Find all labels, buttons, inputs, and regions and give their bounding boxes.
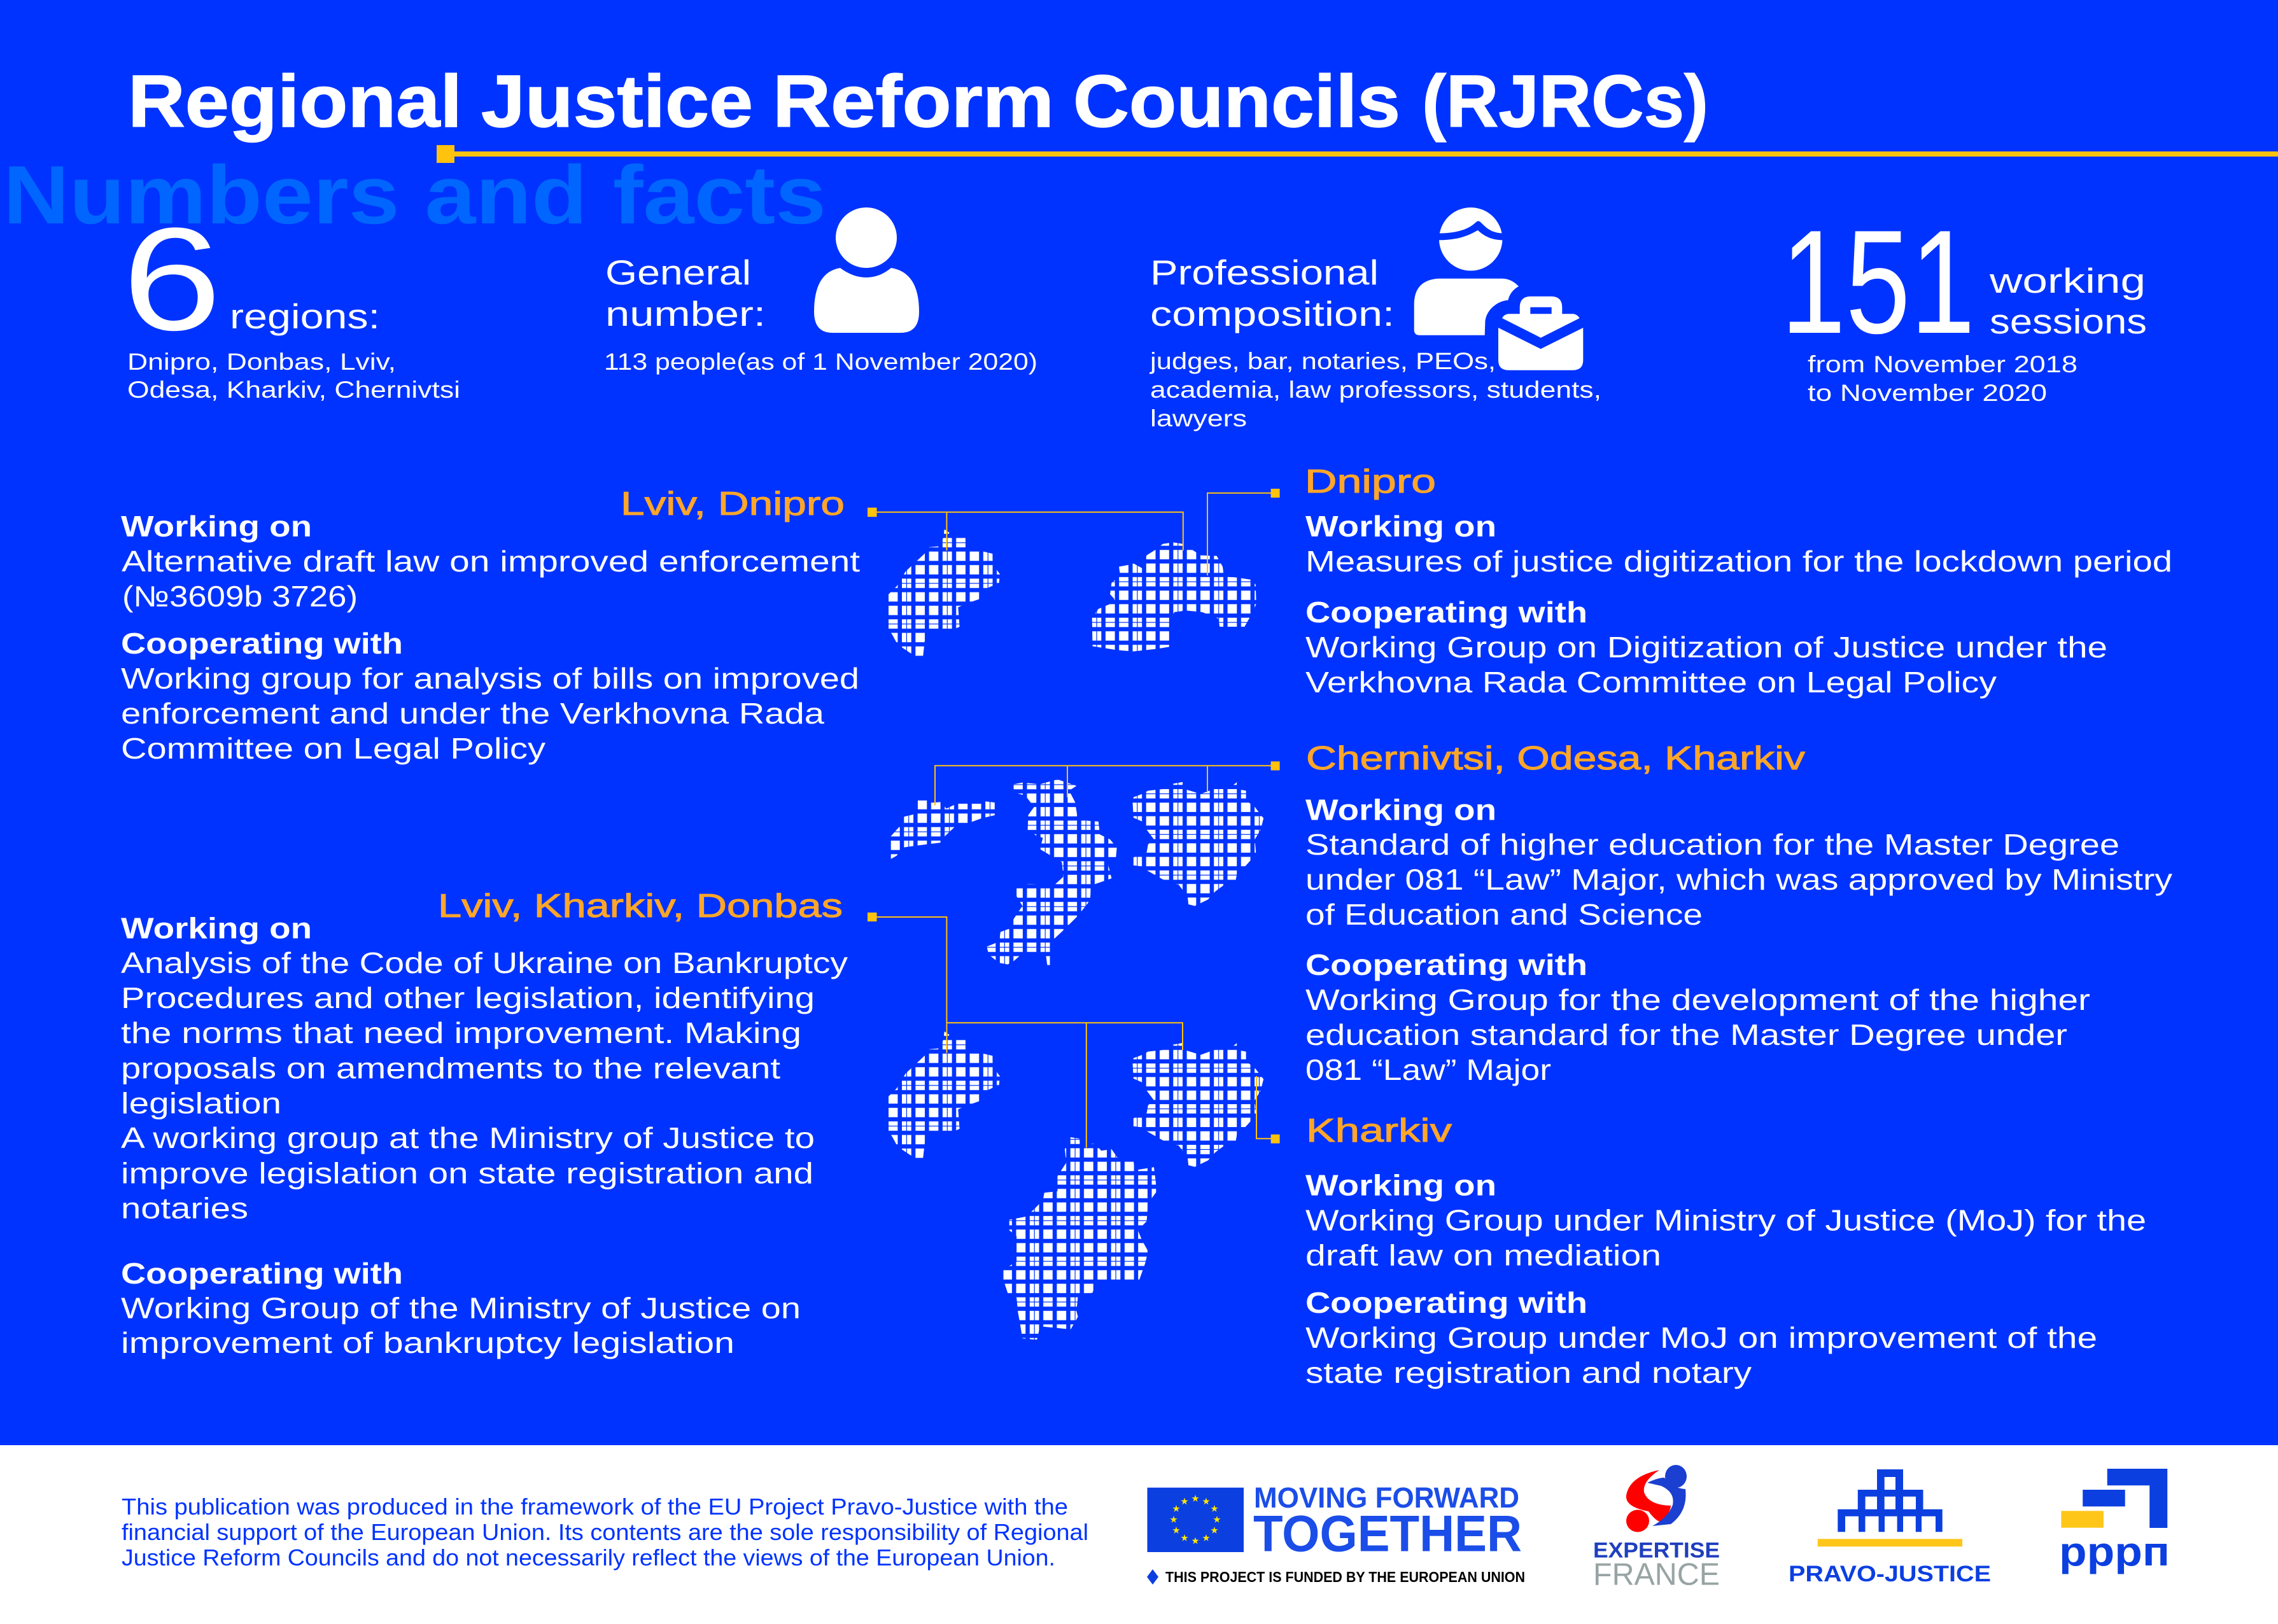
regions list: Dnipro, Donbas, Lviv,: [127, 348, 396, 375]
composition list: [1150, 347, 1601, 431]
map: Donetsk and Luhansk (Donbas): [999, 1133, 1165, 1340]
block: working on: Working on: [1305, 1168, 1496, 1201]
panel: working sessions stat: [1781, 200, 2147, 406]
block: cooperating with: Cooperating with: [121, 1257, 403, 1290]
block: cooperating with: Cooperating with: [1305, 596, 1587, 629]
block: cooperating with: state registration and notary: [1305, 1356, 1752, 1389]
block: working on: A working group at the Ministry of Justice to: [121, 1121, 815, 1154]
block: working on: Working on: [1305, 793, 1496, 826]
title: Justice: [481, 60, 753, 143]
block: working on: Alternative draft law on improved enforcement: [122, 545, 860, 578]
logo: EU moving forward together: TOGETHER: [1253, 1506, 1522, 1563]
icon: professional with briefcase: [1414, 207, 1583, 370]
label: general number: number:: [605, 294, 766, 333]
block: cooperating with: Working Group of the Ministry of Justice on: [121, 1292, 801, 1325]
block: working on: under 081 “Law” Major, which was approved by Ministry: [1305, 863, 2172, 896]
block: working on: [1305, 510, 2172, 578]
block: working on: (№3609b 3726): [122, 580, 358, 613]
logo: RRRP: рррп: [2059, 1529, 2170, 1574]
panel: Lviv, Dnipro: [121, 486, 860, 765]
title: Councils: [1073, 60, 1400, 143]
label: working sessions: working: [1989, 261, 2146, 300]
panel: Lviv, Kharkiv, Donbas: [121, 888, 848, 1359]
connector: Kharkiv: [1256, 1076, 1280, 1144]
logo: Expertise France: EXPERTISE: [1593, 1539, 1720, 1563]
sessions period: to November 2020: [1808, 379, 2047, 406]
block: cooperating with: [1305, 948, 2090, 1086]
heading: Chernivtsi, Odesa, Kharkiv: Chernivtsi, Odesa, Kharkiv: [1306, 740, 1805, 777]
logo: Expertise France: FRANCE: [1593, 1558, 1720, 1592]
logo: Pravo-Justice: [1789, 1469, 1991, 1586]
subtitle: numbers and facts: Numbers and facts: [3, 148, 826, 241]
panel: Kharkiv: [1305, 1112, 2146, 1389]
block: working on: [121, 911, 848, 1224]
block: cooperating with: Verkhovna Rada Committee on Legal Policy: [1305, 666, 1997, 699]
title: [128, 60, 1708, 143]
footer panel: [0, 1445, 2278, 1624]
map: Dnipro: [1088, 538, 1260, 652]
logo: EU moving forward together: THIS PROJECT IS FUNDED BY THE EUROPEAN UNION: [1165, 1569, 1525, 1585]
block: cooperating with: [121, 1257, 801, 1359]
block: cooperating with: Working Group under MoJ on improvement of the: [1305, 1321, 2097, 1354]
block: working on: Analysis of the Code of Ukraine on Bankruptcy: [121, 946, 848, 979]
composition list: academia, law professors, students,: [1150, 376, 1601, 403]
heading: Kharkiv: Kharkiv: [1306, 1112, 1452, 1149]
sessions period: [1808, 351, 2078, 406]
block: working on: Working on: [1305, 510, 1496, 543]
panel: regions stat: [122, 197, 460, 403]
block: cooperating with: [1305, 1286, 2097, 1389]
block: working on: [1305, 793, 2172, 931]
block: cooperating with: [1305, 596, 2107, 699]
logo: Pravo-Justice: PRAVO-JUSTICE: [1789, 1562, 1991, 1586]
panel: general number stat: [604, 207, 1037, 375]
block: working on: the norms that need improvement. Making: [121, 1016, 801, 1049]
block: cooperating with: Cooperating with: [1305, 948, 1587, 981]
label: professional composition: Professional: [1150, 253, 1379, 292]
icon: person: [814, 207, 919, 333]
label: professional composition: [1150, 253, 1395, 333]
block: cooperating with: [121, 627, 859, 765]
block: working on: Procedures and other legislation, identifying: [121, 981, 815, 1014]
block: working on: proposals on amendments to the relevant: [121, 1051, 780, 1084]
title: Reform: [773, 60, 1054, 143]
block: working on: improve legislation on state registration and: [121, 1157, 813, 1190]
block: cooperating with: 081 “Law” Major: [1305, 1053, 1551, 1086]
sessions period: from November 2018: [1808, 351, 2078, 377]
connector: Lviv, Dnipro: [868, 508, 1183, 550]
block: working on: [121, 510, 860, 613]
disclaimer text: financial support of the European Union. Its contents are the sole responsibility of Regional: [122, 1519, 1088, 1545]
disclaimer text: [122, 1494, 1088, 1571]
label: working sessions: sessions: [1990, 302, 2147, 341]
heading: Lviv, Dnipro: Lviv, Dnipro: [621, 486, 845, 522]
block: cooperating with: Committee on Legal Policy: [121, 732, 545, 765]
block: cooperating with: education standard for the Master Degree under: [1305, 1018, 2067, 1051]
composition list: lawyers: [1150, 405, 1247, 431]
logo: EU moving forward together: MOVING FORWARD: [1254, 1481, 1519, 1514]
block: working on: Working Group under Ministry of Justice (MoJ) for the: [1305, 1204, 2146, 1237]
regions list: Odesa, Kharkiv, Chernivtsi: [127, 376, 460, 403]
regions list: [127, 348, 460, 403]
label: general number: General: [605, 253, 751, 292]
title: Regional: [128, 60, 462, 143]
map: Chernivtsi: [891, 801, 995, 859]
map: Odesa: [983, 776, 1123, 967]
logo: EU moving forward together: [1147, 1481, 1525, 1585]
label: working sessions: [1989, 261, 2147, 341]
block: working on: Working on: [121, 911, 312, 944]
block: working on: Standard of higher education for the Master Degree: [1305, 828, 2120, 861]
block: cooperating with: Working Group on Digitization of Justice under the: [1305, 631, 2107, 664]
disclaimer text: This publication was produced in the framework of the EU Project Pravo-Justice with the: [122, 1494, 1068, 1520]
number 6: 6: [122, 197, 221, 361]
composition list: judges, bar, notaries, PEOs,: [1150, 347, 1496, 374]
connector: Chernivtsi, Odesa, Kharkiv: [935, 761, 1280, 806]
block: cooperating with: Working group for analysis of bills on improved: [121, 662, 859, 695]
label: general number: [605, 253, 766, 333]
block: working on: Working on: [121, 510, 312, 543]
heading: Lviv, Kharkiv, Donbas: Lviv, Kharkiv, Donbas: [438, 888, 843, 925]
block: cooperating with: Cooperating with: [1305, 1286, 1587, 1319]
title: (RJRCs): [1422, 60, 1708, 143]
panel: professional composition stat: [1150, 207, 1601, 431]
block: cooperating with: Working Group for the development of the higher: [1305, 983, 2090, 1016]
label: professional composition: composition:: [1150, 294, 1395, 333]
panel: Dnipro: [1305, 463, 2172, 699]
map: Lviv (lower): [889, 1031, 1000, 1158]
block: working on: legislation: [121, 1087, 281, 1120]
map: Lviv (top): [889, 529, 1000, 656]
title rule with square marker: [437, 145, 2278, 163]
block: cooperating with: enforcement and under the Verkhovna Rada: [121, 697, 824, 730]
connector: Lviv, Kharkiv, Donbas: [868, 913, 1183, 1148]
people count: 113 people(as of 1 November 2020): [604, 348, 1037, 375]
block: working on: of Education and Science: [1305, 898, 1703, 931]
logo: RRRP: [2059, 1469, 2170, 1574]
map: Kharkiv (upper): [1133, 781, 1264, 906]
disclaimer text: Justice Reform Councils and do not necessarily reflect the views of the European Union.: [122, 1544, 1055, 1571]
heading: Dnipro: Dnipro: [1305, 463, 1436, 500]
block: working on: Measures of justice digitization for the lockdown period: [1305, 545, 2172, 578]
number 151: 151: [1781, 200, 1975, 365]
block: cooperating with: improvement of bankruptcy legislation: [121, 1326, 735, 1359]
connector: Dnipro: [1207, 489, 1280, 575]
label: regions: regions:: [230, 297, 380, 336]
map: Kharkiv (lower): [1133, 1043, 1264, 1167]
block: working on: [1305, 1168, 2146, 1271]
block: cooperating with: Cooperating with: [121, 627, 403, 660]
panel: Chernivtsi, Odesa, Kharkiv: [1305, 740, 2172, 1086]
logo: Expertise France: [1593, 1465, 1720, 1592]
block: working on: draft law on mediation: [1305, 1238, 1661, 1271]
block: working on: notaries: [121, 1191, 248, 1224]
